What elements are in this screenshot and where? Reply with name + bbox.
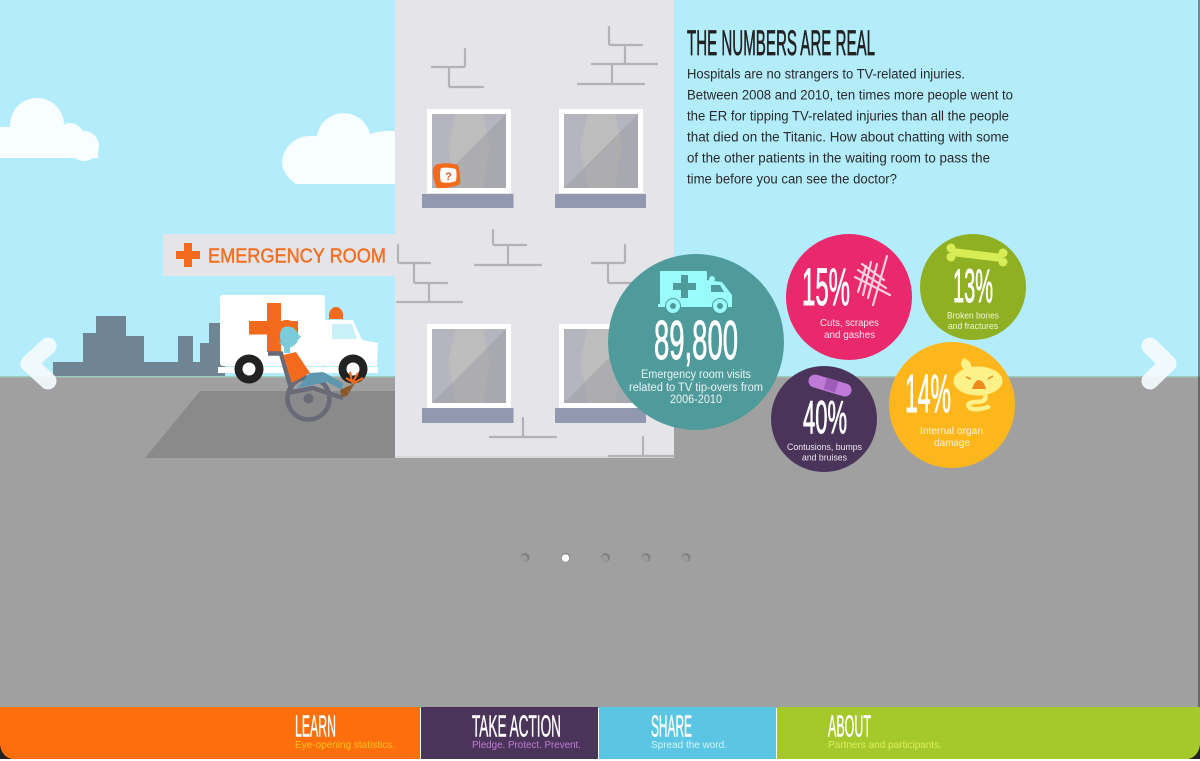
stat circle: 14% internal organ damage — [889, 342, 1015, 468]
stat circle: 14% internal organ damage: 14% — [905, 364, 951, 424]
stat circle: 89,800 ER visits: 2006-2010 — [670, 394, 722, 406]
stat circle: 89,800 ER visits: 89,800 — [654, 309, 738, 371]
icon: bone — [946, 244, 1008, 266]
icon: sign cross — [176, 243, 200, 267]
ground — [0, 376, 1200, 708]
emergency room sign — [163, 234, 396, 276]
nav: learn: Eye-opening statistics. — [295, 739, 395, 751]
stat circle: 89,800 ER visits: related to TV tip-overs from — [629, 382, 763, 394]
icon: orange TV with question mark — [433, 163, 460, 188]
stat circle: 89,800 ER visits — [608, 254, 784, 430]
nav: take action — [421, 707, 598, 759]
stat circle: 15% cuts: Cuts, scrapes — [820, 317, 879, 329]
nav: take action: Pledge. Protect. Prevent. — [472, 739, 581, 751]
ambulance — [218, 295, 378, 384]
infographic scene: THE NUMBERS ARE REAL — [687, 24, 875, 63]
dark page corners — [0, 745, 1200, 759]
icon: organ — [954, 358, 1002, 409]
stat circle: 13% broken bones: and fractures — [948, 321, 998, 332]
stat circle: 40% contusions: Contusions, bumps — [787, 442, 862, 453]
stat circle: 15% cuts: and gashes — [824, 329, 875, 341]
nav: about — [777, 707, 1200, 759]
nav: learn: LEARN — [295, 708, 336, 744]
stat circle: 40% contusions — [771, 366, 877, 472]
stat circle: 13% broken bones — [920, 234, 1026, 340]
nav: share: Spread the word. — [651, 739, 727, 751]
window top left — [422, 109, 514, 208]
stat circle: 14% internal organ damage: Internal organ — [920, 425, 983, 437]
intro text block: of the other patients in the waiting room to pass the — [687, 150, 990, 166]
carousel dots — [520, 553, 690, 562]
emergency room sign: EMERGENCY ROOM — [208, 244, 386, 268]
stat circle: 89,800 ER visits: Emergency room visits — [641, 369, 751, 381]
cloud left — [0, 98, 99, 161]
right arrow — [1150, 346, 1168, 381]
nav: learn — [0, 707, 420, 759]
city skyline — [53, 316, 225, 376]
sky — [0, 0, 1200, 377]
nav: share — [599, 707, 776, 759]
left arrow — [29, 346, 48, 381]
icon: orange TV with question mark: ? — [445, 171, 452, 183]
stat circle: 13% broken bones: Broken bones — [947, 310, 999, 322]
nav: take action: TAKE ACTION — [472, 708, 561, 744]
intro text block: the ER for tipping TV-related injuries than all the people — [687, 108, 1009, 124]
patient in wheelchair — [268, 320, 363, 420]
stat circle: 13% broken bones: 13% — [953, 259, 993, 312]
nav: about: ABOUT — [828, 708, 871, 744]
intro text block: time before you can see the doctor? — [687, 172, 897, 186]
stat circle: 15% cuts — [786, 234, 912, 360]
window top right — [555, 109, 646, 208]
brick marks — [397, 27, 674, 456]
icon: ambulance — [658, 271, 732, 314]
stat circle: 40% contusions: and bruises — [802, 452, 847, 464]
window bottom left — [422, 324, 514, 423]
right page edge — [1198, 0, 1200, 708]
stat circle: 15% cuts: 15% — [802, 258, 850, 317]
stat circle: 40% contusions: 40% — [803, 391, 847, 443]
intro text block: that died on the Titanic. How about chatting with some — [687, 130, 1009, 144]
stat circle: 14% internal organ damage: damage — [934, 437, 970, 449]
window bottom right — [555, 324, 646, 423]
intro text block: Between 2008 and 2010, ten times more people went to — [687, 88, 1013, 102]
building — [395, 0, 674, 458]
icon: bandage — [815, 378, 845, 392]
intro text block — [687, 66, 1013, 186]
shadow ramp — [145, 391, 396, 458]
nav: about: Partners and participants. — [828, 739, 942, 751]
icon: scratches — [855, 256, 890, 305]
intro text block: Hospitals are no strangers to TV-related injuries. — [687, 66, 965, 82]
nav: share: SHARE — [651, 708, 692, 744]
bottom navigation — [0, 707, 1200, 759]
cloud right — [282, 113, 396, 184]
